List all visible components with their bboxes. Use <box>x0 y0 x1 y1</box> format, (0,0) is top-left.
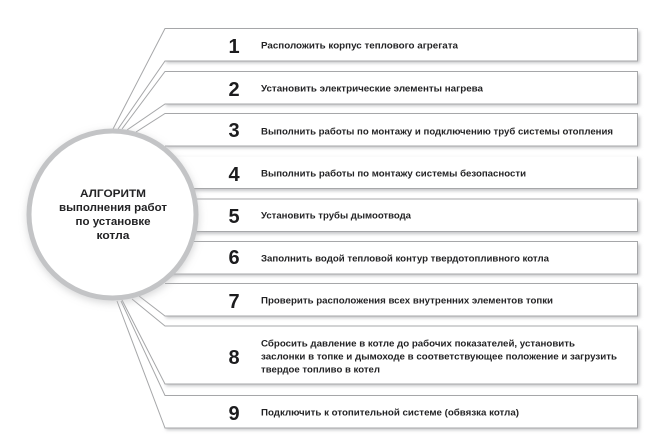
step 9 number: 9 <box>228 403 240 425</box>
circle title: котла <box>96 230 130 242</box>
panel: step 2 <box>122 72 638 130</box>
step 8 text: Сбросить давление в котле до рабочих показателей, установить <box>261 338 575 348</box>
step 1 number: 1 <box>228 36 240 58</box>
panel: step 8 <box>122 299 638 384</box>
step 8 text: твердое топливо в котел <box>261 364 380 374</box>
step 7 number: 7 <box>228 291 240 313</box>
central circle <box>27 131 199 303</box>
panel: step 6 <box>165 242 638 274</box>
circle title: по установке <box>76 216 150 228</box>
panel: step 3 <box>136 114 638 146</box>
step 8 text: заслонки в топке и дымоходе в соответствующее положение и загрузить <box>261 350 617 362</box>
box shadows <box>166 31 640 430</box>
step 6 number: 6 <box>228 247 240 269</box>
step 7 text: Проверить расположения всех внутренних элементов топки <box>261 294 553 306</box>
step 8 number: 8 <box>228 347 240 369</box>
panel: step 5 <box>165 199 638 232</box>
panel: step 9 <box>117 301 638 428</box>
step 4 number: 4 <box>228 164 240 186</box>
step 3 text: Выполнить работы по монтажу и подключению труб системы отопления <box>261 126 613 136</box>
step 5 number: 5 <box>228 206 240 228</box>
step 4 text: Выполнить работы по монтажу системы безопасности <box>261 168 526 178</box>
step 1 text: Расположить корпус теплового агрегата <box>261 40 459 50</box>
step 5 text: Установить трубы дымоотвода <box>261 210 412 220</box>
circle title: АЛГОРИТМ <box>80 188 146 200</box>
panel: step 1 <box>113 28 638 129</box>
step 3 number: 3 <box>228 120 240 142</box>
circle title <box>59 188 168 242</box>
circle title: выполнения работ <box>59 202 168 214</box>
step 2 number: 2 <box>228 79 240 101</box>
step 2 text: Установить электрические элементы нагрева <box>261 82 484 94</box>
panel: step 7 <box>139 284 638 316</box>
step 6 text: Заполнить водой тепловой контур твердотопливного котла <box>261 252 550 264</box>
step 9 text: Подключить к отопительной системе (обвязка котла) <box>261 406 519 418</box>
step 8 text <box>261 338 617 374</box>
panel: step 4 <box>165 156 638 188</box>
